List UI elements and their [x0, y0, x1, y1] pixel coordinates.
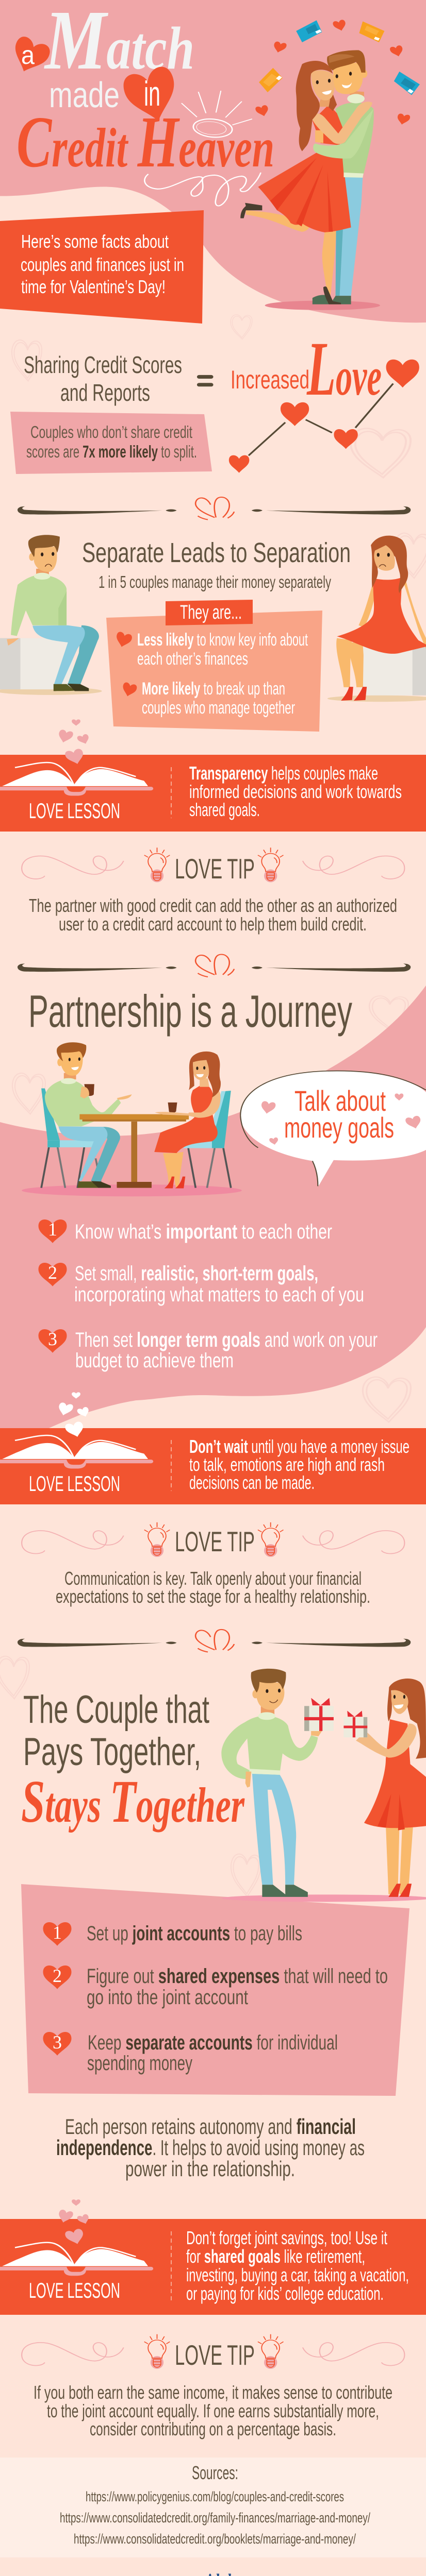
icon: blue credit card small: [394, 72, 420, 95]
panel: intro red box: [0, 210, 204, 324]
tip text: [29, 895, 397, 935]
lesson text: shared goals.: [189, 799, 260, 820]
panel: love tip two: [22, 1522, 404, 1607]
step 2: Figure out shared expenses that will need to: [87, 1965, 388, 1988]
panel: love lesson two: [0, 1392, 426, 1504]
intro text: Here’s some facts about: [21, 231, 169, 252]
step 1: 1: [53, 1922, 62, 1943]
callout: talk about money goals: Talk about: [294, 1084, 386, 1117]
step 1: 1: [48, 1219, 57, 1240]
intro text: time for Valentine’s Day!: [21, 276, 166, 297]
divider three: [18, 1630, 411, 1652]
panel: love lesson three: [0, 2199, 426, 2315]
icon: floating hearts: [255, 19, 411, 126]
heading: couple that pays together: Pays Together,: [23, 1730, 201, 1774]
illustration: couple with gifts: [221, 1669, 426, 1902]
bullet: more likely: couples who manage together: [142, 698, 295, 718]
script: stays together: Stays Together: [21, 1768, 245, 1835]
icon: heart behind in: [121, 64, 183, 127]
heading: sharing credit scores: Sharing Credit Scores: [24, 351, 182, 378]
divider one: [18, 497, 411, 520]
title word made: made: [49, 75, 120, 115]
illustration: hugging couple: [240, 50, 380, 310]
lesson text: [186, 2227, 409, 2304]
illustration: sad man on bench: [0, 535, 102, 695]
panel: love tip three: [22, 2334, 404, 2439]
callout: talk about money goals: [240, 1071, 426, 1186]
source links: [60, 2489, 370, 2547]
label: love lesson: LOVE LESSON: [29, 2278, 120, 2302]
fact text: scores are 7x more likely to split.: [26, 442, 197, 461]
lesson text: for shared goals like retirement,: [186, 2246, 365, 2267]
panel: love tip one: [22, 848, 404, 935]
panel: header pink background: [0, 0, 426, 323]
title words Credit Heaven: Credit Heaven: [17, 101, 274, 182]
tip heading: LOVE TIP: [175, 853, 255, 885]
lesson text: decisions can be made.: [189, 1472, 315, 1493]
step 2: Set small, realistic, short-term goals,: [75, 1262, 318, 1285]
step 2: 2: [48, 1262, 57, 1283]
label: they are: [166, 600, 253, 625]
list: journey steps: [38, 1219, 378, 1372]
step 3: spending money: [87, 2052, 192, 2075]
bullet: more likely: More likely to break up than: [142, 679, 285, 699]
text block: autonomy: Each person retains autonomy and financial: [65, 2114, 356, 2139]
sources heading: Sources:: [192, 2462, 238, 2483]
icons: floating credit cards and hearts: [255, 19, 420, 126]
icon: orange credit card: [359, 21, 384, 42]
panel: sources: [0, 2458, 426, 2557]
intro text: couples and finances just in: [21, 254, 184, 275]
panel: they are list: [106, 600, 322, 732]
text block: autonomy: [56, 2114, 365, 2181]
heading: couple that pays together: [21, 1688, 245, 1835]
tip text: [34, 2382, 392, 2439]
heading: increased love: [231, 326, 382, 412]
bullet: less likely: each other’s finances: [137, 649, 248, 669]
label: they are: They are...: [180, 602, 242, 623]
tip header ornaments: [22, 1522, 404, 1557]
step 2: go into the joint account: [87, 1986, 248, 2009]
icon: gift from her: [343, 1710, 367, 1737]
step 3: Keep separate accounts for individual: [88, 2031, 338, 2054]
icon: heart behind a: [8, 35, 52, 78]
step 3: budget to achieve them: [75, 1349, 234, 1372]
text block: autonomy: power in the relationship.: [125, 2157, 295, 2181]
tip heading: LOVE TIP: [175, 2339, 255, 2371]
icon: equals sign: [197, 375, 214, 386]
step 3: Then set longer term goals and work on your: [75, 1329, 378, 1351]
panel: joint accounts box: [21, 1884, 409, 2096]
tip heading: LOVE TIP: [175, 1526, 255, 1557]
tip header ornaments: [22, 2334, 404, 2369]
heading: increased love: Increased: [231, 365, 309, 394]
tip header ornaments: [22, 848, 404, 882]
icon: halo with rays and swirl: [144, 91, 261, 206]
title word in: in: [144, 74, 160, 113]
icon: open book with white hearts: [0, 1392, 153, 1469]
step 3: [38, 1329, 378, 1372]
step 1: Set up joint accounts to pay bills: [87, 1922, 302, 1945]
script word Love: Love: [306, 326, 382, 412]
heading: couple that pays together: The Couple that: [23, 1688, 209, 1732]
heading: sharing credit scores: and Reports: [60, 379, 150, 406]
label: love lesson: LOVE LESSON: [29, 1471, 120, 1496]
heading: sharing credit scores: [24, 351, 182, 406]
icon: gift from him: [304, 1698, 334, 1731]
step 2: [43, 1965, 388, 2009]
panel: partnership pink wave: [0, 986, 426, 1428]
divider two: [18, 955, 411, 977]
lesson text: [189, 1436, 409, 1493]
decorative faint hearts: [0, 315, 426, 1896]
step 3: 3: [48, 1329, 57, 1349]
list: joint account steps: [43, 1922, 388, 2075]
panel: credit score fact: [10, 412, 212, 474]
tip text: [56, 1568, 370, 1607]
illustration: couple at table: [22, 1042, 242, 1196]
step 2: [38, 1262, 364, 1306]
label: love lesson: LOVE LESSON: [29, 799, 120, 823]
fact text: [26, 422, 197, 461]
title: [8, 0, 274, 182]
lesson text: [189, 762, 402, 820]
illustration: sad woman on bench: [327, 536, 426, 702]
panel: love lesson one: [0, 719, 426, 832]
bullet: less likely: [114, 630, 308, 669]
step 3: 3: [53, 2032, 62, 2053]
chart: rising hearts line: [229, 360, 419, 473]
icon: orange credit card small: [259, 68, 283, 92]
icon: open book with hearts: [0, 2199, 153, 2276]
bullet: less likely: Less likely to know key info about: [137, 630, 308, 650]
step 3: [43, 2031, 338, 2075]
bullet: more likely: [121, 679, 295, 718]
step 1: Know what’s important to each other: [75, 1221, 332, 1243]
intro text: [21, 231, 184, 297]
title word a: a: [21, 41, 35, 70]
icon: open book with hearts: [0, 719, 153, 796]
step 2: 2: [53, 1965, 62, 1986]
icon: blue credit card: [296, 20, 322, 42]
fact text: Couples who don’t share credit: [30, 422, 192, 442]
